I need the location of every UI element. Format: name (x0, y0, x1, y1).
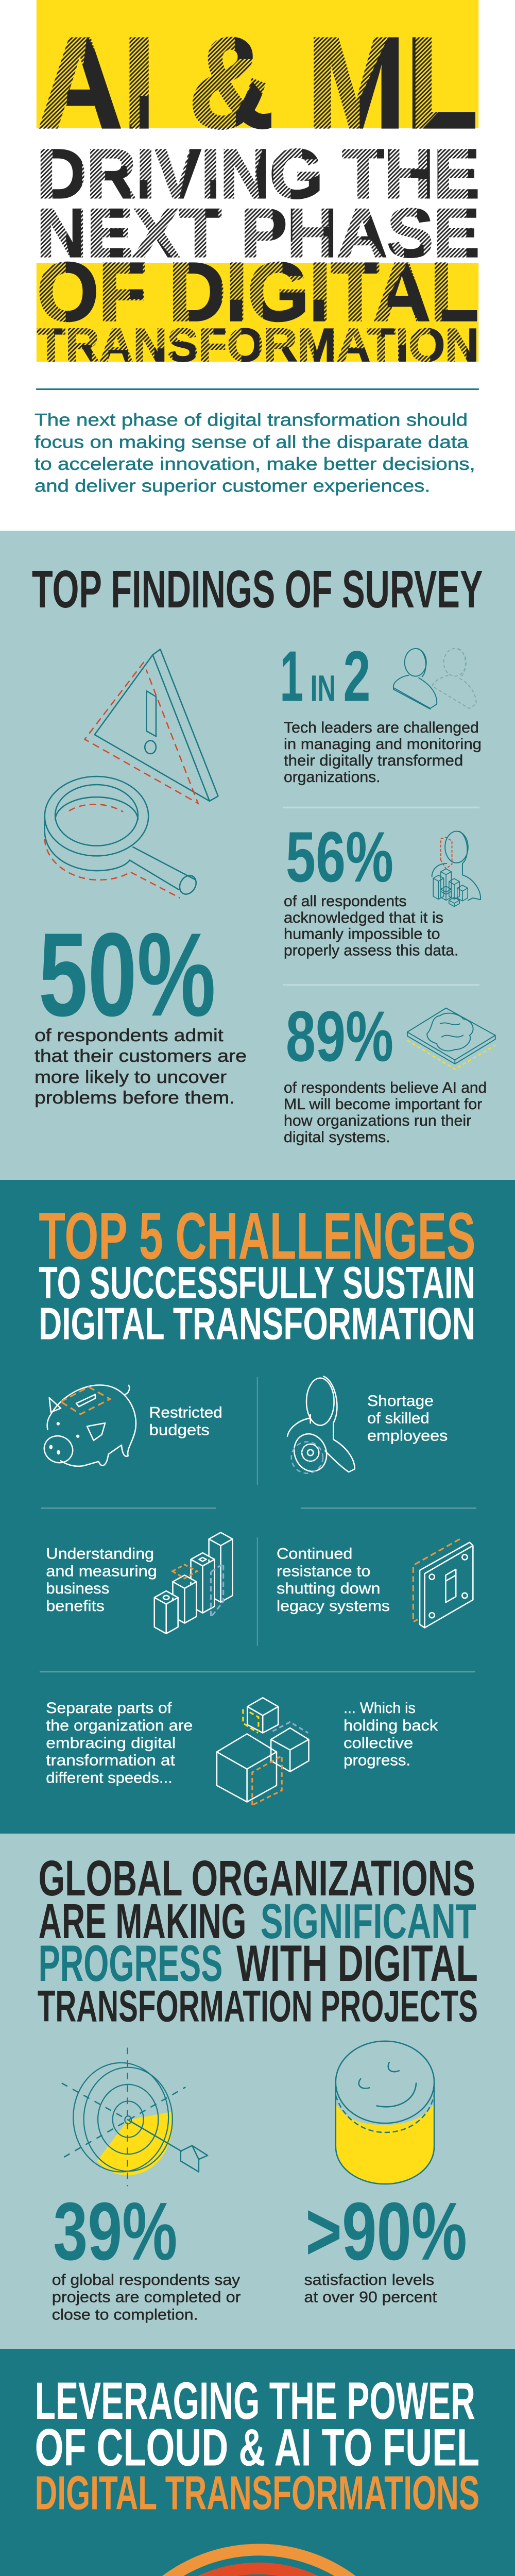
text: understanding business benefits (46, 1546, 157, 1615)
text: 1 in 2 description (284, 719, 482, 786)
heading: global organizations: ARE MAKING (39, 1894, 246, 1949)
intro paragraph: focus on making sense of all the disparate data (35, 432, 469, 452)
intro paragraph: and deliver superior customer experiences. (35, 477, 430, 496)
stat: 1 in 2: 2 (343, 636, 370, 716)
title line: transformation: TRANSFORMATION (37, 319, 479, 371)
text: separate parts (46, 1700, 193, 1786)
text: understanding business benefits: benefits (46, 1598, 105, 1615)
title line: next phase: NEXT PHASE (37, 195, 479, 272)
text: 1 in 2 description: their digitally transformed (284, 752, 463, 769)
text: restricted budgets (149, 1404, 222, 1439)
heading: top 5 challenges (39, 1199, 475, 1349)
text: resistance to shutting down legacy systems: resistance to (277, 1563, 370, 1580)
text: 89% description: of respondents believe AI and (284, 1079, 487, 1096)
text: 39% description: of global respondents say (52, 2272, 241, 2289)
title line: of digital: OF DIGITAL (37, 246, 478, 338)
text: shortage of skilled employees: of skilled (367, 1410, 430, 1427)
icon: warning triangle (85, 649, 218, 803)
text: 1 in 2 description: in managing and monitoring (284, 736, 482, 753)
text: holding back progress: holding back (344, 1717, 438, 1734)
title: AI & ML: AI & ML (37, 11, 478, 155)
text: holding back progress: ... Which is (344, 1700, 416, 1717)
text: 39% description (52, 2272, 241, 2324)
icon: magnifying glass (45, 776, 199, 898)
icon: piggy bank (40, 1385, 136, 1467)
stat: >90%: >90% (305, 2185, 467, 2277)
stat: 1 in 2: 1 (280, 636, 303, 716)
text: separate parts: Separate parts of (46, 1700, 172, 1717)
text: holding back progress: progress. (344, 1752, 410, 1769)
text: understanding business benefits: Understanding (46, 1546, 154, 1563)
panel: global organizations (0, 1834, 515, 2349)
text: 56% description: acknowledged that it is (284, 909, 443, 926)
stat: 1 in 2 (280, 636, 370, 716)
text: holding back progress (344, 1700, 438, 1769)
panel: top findings of survey (0, 531, 515, 1180)
stat: 39%: 39% (53, 2185, 177, 2277)
panel: title header (0, 0, 515, 531)
text: >90% description: at over 90 percent (304, 2289, 437, 2306)
stat: 1 in 2: IN (311, 668, 336, 709)
chart: radial bars by country (103, 2550, 415, 2576)
stat: 89%: 89% (286, 996, 393, 1076)
intro paragraph: to accelerate innovation, make better decisions, (35, 454, 475, 474)
heading: global organizations (38, 1850, 478, 2031)
intro paragraph (35, 411, 475, 496)
icon: cubes (217, 1698, 308, 1805)
text: restricted budgets: Restricted (149, 1404, 222, 1421)
text: shortage of skilled employees: Shortage (367, 1393, 434, 1410)
icon: person with data bars (432, 832, 480, 907)
text: 89% description (284, 1079, 487, 1146)
text: resistance to shutting down legacy systems: Continued (277, 1546, 352, 1563)
text: 1 in 2 description: Tech leaders are challenged (284, 719, 479, 736)
panel: top 5 challenges (0, 1180, 515, 1834)
icon: brain on book (407, 1008, 495, 1069)
text: 50% description: more likely to uncover (35, 1067, 227, 1087)
icon: two people (393, 649, 476, 709)
text: separate parts: different speeds... (46, 1769, 173, 1786)
text: understanding business benefits: and measuring (46, 1563, 157, 1580)
text: 1 in 2 description: organizations. (284, 769, 381, 786)
icon: bar blocks (154, 1532, 233, 1634)
text: 56% description: of all respondents (284, 893, 407, 910)
heading: global organizations: PROGRESS (39, 1935, 222, 1992)
icon: smiling satisfaction cylinder (336, 2041, 434, 2184)
icon: person with gear (287, 1377, 355, 1476)
icon: target with arrow (62, 2047, 208, 2187)
text: separate parts: transformation at (46, 1752, 175, 1769)
stat: 56%: 56% (286, 817, 393, 897)
text: resistance to shutting down legacy systems: legacy systems (277, 1598, 390, 1615)
text: separate parts: the organization are (46, 1717, 193, 1734)
heading: leveraging the power (35, 2371, 479, 2520)
text: 50% description: problems before them. (35, 1088, 235, 1108)
text: 56% description: humanly impossible to (284, 926, 440, 943)
text: >90% description (304, 2272, 437, 2306)
text: restricted budgets: budgets (149, 1422, 210, 1439)
text: 89% description: ML will become important for (284, 1096, 482, 1113)
intro paragraph: The next phase of digital transformation should (35, 411, 468, 430)
text: separate parts: embracing digital (46, 1735, 176, 1752)
text: resistance to shutting down legacy systems (277, 1546, 390, 1615)
text: 39% description: close to completion. (52, 2307, 198, 2324)
text: 56% description (284, 893, 458, 959)
text: 50% description (35, 1026, 247, 1108)
text: resistance to shutting down legacy systems: shutting down (277, 1580, 381, 1597)
text: shortage of skilled employees: employees (367, 1428, 448, 1445)
text: 89% description: digital systems. (284, 1129, 390, 1146)
text: understanding business benefits: business (46, 1580, 109, 1597)
text: shortage of skilled employees (367, 1393, 448, 1445)
text: 56% description: properly assess this data. (284, 942, 458, 959)
stat: 50%: 50% (39, 908, 216, 1041)
title line: driving the: DRIVING THE (37, 135, 479, 213)
text: 39% description: projects are completed or (52, 2289, 241, 2306)
icon: wall switch (413, 1539, 473, 1628)
text: 50% description: of respondents admit (35, 1026, 224, 1045)
text: holding back progress: collective (344, 1735, 413, 1752)
text: 50% description: that their customers are (35, 1046, 247, 1066)
text: >90% description: satisfaction levels (304, 2272, 434, 2289)
text: 89% description: how organizations run their (284, 1112, 471, 1129)
panel: leveraging cloud and AI (0, 2349, 515, 2576)
